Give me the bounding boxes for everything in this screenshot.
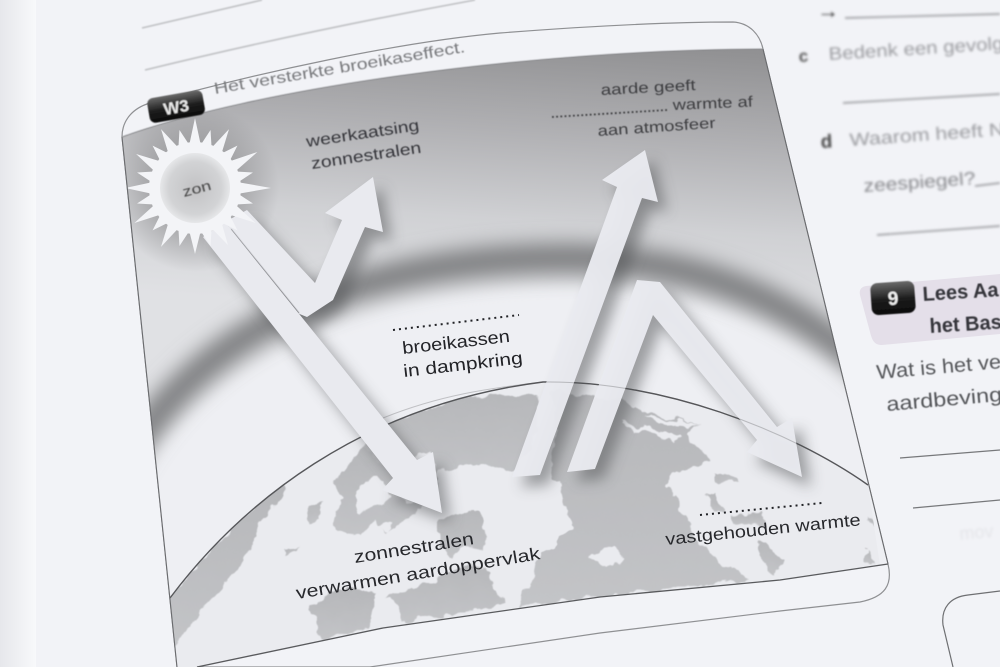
badge W3 [146, 89, 206, 124]
question d: d [820, 131, 833, 153]
earth land [150, 382, 900, 667]
icon: sun halo [126, 118, 270, 265]
label: aarde geeft warmte af aan atmosfeer: aarde geeft [600, 77, 697, 99]
question 9 text: Wat is het ve [876, 351, 1000, 384]
label: weerkaatsing zonnestralen: weerkaatsing [304, 117, 420, 151]
dark edge between rays [230, 230, 298, 314]
sky gradient [122, 49, 828, 416]
arrow: heat held back [567, 280, 802, 477]
question 9 answer lines [900, 450, 1000, 508]
atmosphere band: greenhouse gases [120, 258, 890, 470]
left and right edge of illustration [122, 49, 888, 667]
badge 9: 9 [887, 289, 899, 310]
horizon line [170, 382, 868, 598]
heading: Lees Aa...: Lees Aa [922, 279, 1000, 306]
label: zonnestralen verwarmen aardoppervlak [294, 528, 542, 603]
question 9 text: aardbeving [886, 384, 1000, 416]
earth map [170, 393, 876, 646]
land islands [357, 416, 700, 600]
label: vastgehouden warmte [664, 503, 861, 549]
question 9 header box [860, 274, 1000, 345]
bottom edge of illustration [197, 564, 888, 667]
label: aarde geeft warmte af aan atmosfeer: warmte af [671, 93, 754, 114]
label: aarde geeft warmte af aan atmosfeer: aan atmosfeer [597, 115, 716, 140]
question 9 text [876, 351, 1000, 416]
faint horizon through arrows [382, 382, 796, 444]
label: broeikassen in dampkring [393, 315, 524, 381]
panel: greenhouse diagram [100, 40, 910, 667]
label: zonnestralen verwarmen aardoppervlak: zonnestralen [352, 528, 475, 567]
badge W3: W3 [162, 96, 190, 119]
label: zon: zon [181, 177, 213, 200]
label: zonnestralen verwarmen aardoppervlak: verwarmen aardoppervlak [294, 543, 542, 603]
next answer box [943, 591, 1000, 667]
arrow: reflected sun rays [225, 177, 383, 317]
label: vastgehouden warmte: vastgehouden warmte [664, 510, 861, 549]
top edge of illustration [122, 49, 763, 137]
arrow: incoming sun rays [203, 222, 442, 513]
faint show-through text: mov [959, 521, 994, 544]
question d text: Waarom heeft N [849, 119, 1000, 150]
light lower atmosphere [156, 284, 888, 596]
icon: sun [125, 118, 271, 254]
question c: c [798, 47, 809, 66]
label: aarde geeft warmte af aan atmosfeer [552, 77, 754, 140]
figure caption: Het versterkte broeikaseffect. [213, 39, 466, 98]
label: weerkaatsing zonnestralen: zonnestralen [310, 140, 422, 173]
arrow shadows [212, 160, 811, 523]
answer lines above the figure [142, 0, 475, 70]
oceans [165, 392, 882, 648]
answer lines [843, 14, 1000, 235]
panel: figure W3 frame [122, 22, 889, 667]
right column: questions c and d [798, 0, 1000, 235]
label: broeikassen in dampkring: in dampkring [402, 348, 524, 381]
arrow: heat radiated to atmosphere [512, 150, 658, 477]
question c text: Bedenk een gevolg [828, 33, 1000, 64]
question d second line: zeespiegel? [863, 168, 976, 196]
badge 9 [870, 281, 916, 315]
label: broeikassen in dampkring: broeikassen [401, 326, 511, 358]
label: weerkaatsing zonnestralen [304, 117, 422, 173]
